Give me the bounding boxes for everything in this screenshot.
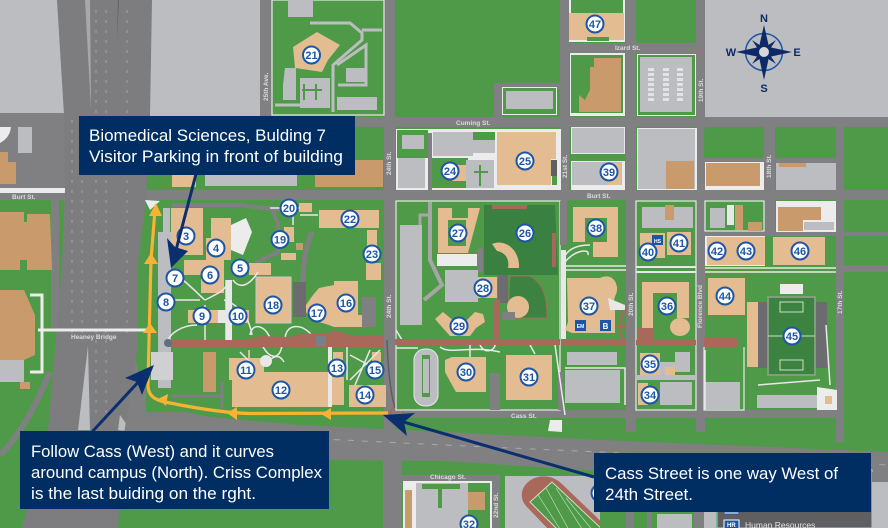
building number badges: 35 [644, 359, 656, 371]
callout: follow Cass: is the last buiding on the rght. [31, 485, 256, 503]
street labels: Heaney Bridge [71, 334, 117, 341]
building number badges: 30 [460, 367, 472, 379]
building number badges: 47 [589, 19, 601, 31]
building number badges: 27 [452, 228, 464, 240]
street labels: Florence Blvd [697, 285, 704, 328]
callout: one way: 24th Street. [605, 486, 693, 504]
street labels: 20th St. [628, 292, 635, 316]
callout: follow Cass [20, 431, 329, 509]
street labels: Cuming St. [456, 120, 490, 127]
icons: building markers [575, 235, 663, 331]
building number badges: 22 [344, 214, 356, 226]
street labels: Chicago St. [430, 474, 466, 481]
compass rose: W [726, 47, 737, 59]
street labels: Burt St. [12, 194, 36, 201]
west campus block [145, 200, 386, 412]
building number badges: 7 [172, 273, 178, 285]
building 37 [565, 276, 617, 333]
parking strip [158, 232, 171, 388]
24th Street roundabout [387, 340, 403, 418]
callout: follow Cass: around campus (North). Criss Complex [31, 464, 323, 482]
building number badges: 3 [183, 231, 189, 243]
street labels: 17th St. [837, 290, 844, 314]
building number badges: 40 [642, 247, 654, 259]
icons: building markers: HS [654, 239, 662, 245]
street labels: 18th St. [766, 154, 773, 178]
stadium field [530, 482, 605, 528]
building number badges: 4 [213, 243, 220, 255]
street labels: 25th Ave. [263, 72, 270, 101]
arrow: to Criss Complex [92, 365, 154, 432]
building number badges: 43 [740, 246, 752, 258]
building number badges: 44 [719, 291, 732, 303]
icons: building markers: B [603, 322, 609, 331]
icons: building markers: EM [577, 324, 584, 330]
building number badges: 8 [163, 297, 169, 309]
west buildings across the highway [0, 212, 152, 455]
compass rose: N [760, 13, 768, 25]
blocks between Cuming and Burt [150, 127, 836, 190]
building number badges: 45 [786, 331, 798, 343]
street labels: 19th St. [698, 78, 705, 102]
building number badges: 29 [453, 321, 465, 333]
north-west block with building 21 [272, 0, 384, 115]
callout: one way [594, 453, 871, 512]
building number badges: 18 [267, 300, 279, 312]
east blocks and stadium [704, 201, 837, 410]
street labels: 24th St. [386, 294, 393, 318]
building number badges: 12 [275, 385, 287, 397]
street labels: Burt St. [587, 193, 611, 200]
building number badges: 26 [519, 228, 531, 240]
building number badges: 15 [369, 365, 381, 377]
brick campus mall [164, 328, 738, 347]
street labels: Cass St. [511, 413, 537, 420]
building number badges: 9 [199, 311, 205, 323]
callout: Building 7: Biomedical Sciences, Bulding 7 [89, 127, 326, 145]
street labels: 22nd St. [493, 493, 500, 518]
stadium track [522, 476, 612, 528]
map base: empty blocks [0, 0, 888, 193]
building number badges: 23 [366, 249, 378, 261]
callout: Building 7 [79, 116, 355, 175]
street labels: 24th St. [386, 151, 393, 175]
street labels: 21st St. [562, 155, 569, 178]
highway north-south [22, 0, 152, 528]
compass rose: S [760, 83, 768, 95]
building number badges: 46 [794, 246, 806, 258]
callout: one way: Cass Street is one way West of [605, 465, 838, 483]
arrow: to Cass one-way [383, 413, 594, 477]
route: yellow path along Cass and north [143, 203, 388, 420]
building number badges: 31 [523, 372, 535, 384]
callout: follow Cass: Follow Cass (West) and it curves [31, 443, 274, 461]
building number badges: 34 [644, 390, 657, 402]
buildings [171, 208, 203, 255]
building number badges: 24 [444, 166, 457, 178]
south campus: Chicago St blocks [400, 470, 888, 528]
building number badges: 6 [207, 270, 213, 282]
blocks north of Cuming [502, 0, 696, 116]
building number badges: 14 [359, 390, 372, 402]
walkways [168, 272, 270, 345]
building number badges: 11 [240, 365, 252, 377]
building number badges: 41 [673, 238, 685, 250]
building number badges: 5 [237, 263, 243, 275]
building number badges: 13 [331, 363, 343, 375]
arrow: to Building 7 [167, 174, 196, 268]
building number badges: 19 [274, 234, 286, 246]
building number badges [158, 16, 808, 528]
central campus block [396, 201, 627, 415]
building number badges: 21 [305, 50, 318, 62]
building number badges: 20 [283, 203, 295, 215]
building number badges: 39 [603, 167, 615, 179]
building number badges: 42 [711, 246, 723, 258]
building number badges: 17 [311, 308, 323, 320]
building 38 [573, 207, 618, 257]
compass rose: E [793, 47, 801, 59]
building number badges: 28 [477, 283, 489, 295]
building number badges: 38 [590, 223, 602, 235]
building number badges: 25 [519, 156, 531, 168]
compass rose [726, 13, 801, 95]
building number badges: 16 [340, 298, 352, 310]
callout: Building 7: Visitor Parking in front of building [89, 148, 343, 166]
street labels: Izard St. [615, 45, 640, 52]
building number badges: 10 [232, 311, 244, 323]
building number badges: 36 [661, 301, 673, 313]
block Florence to 20th [635, 201, 696, 410]
highway Cass curve [118, 360, 888, 528]
building number badges: 37 [583, 301, 595, 313]
green strips south of Cass [384, 418, 562, 432]
